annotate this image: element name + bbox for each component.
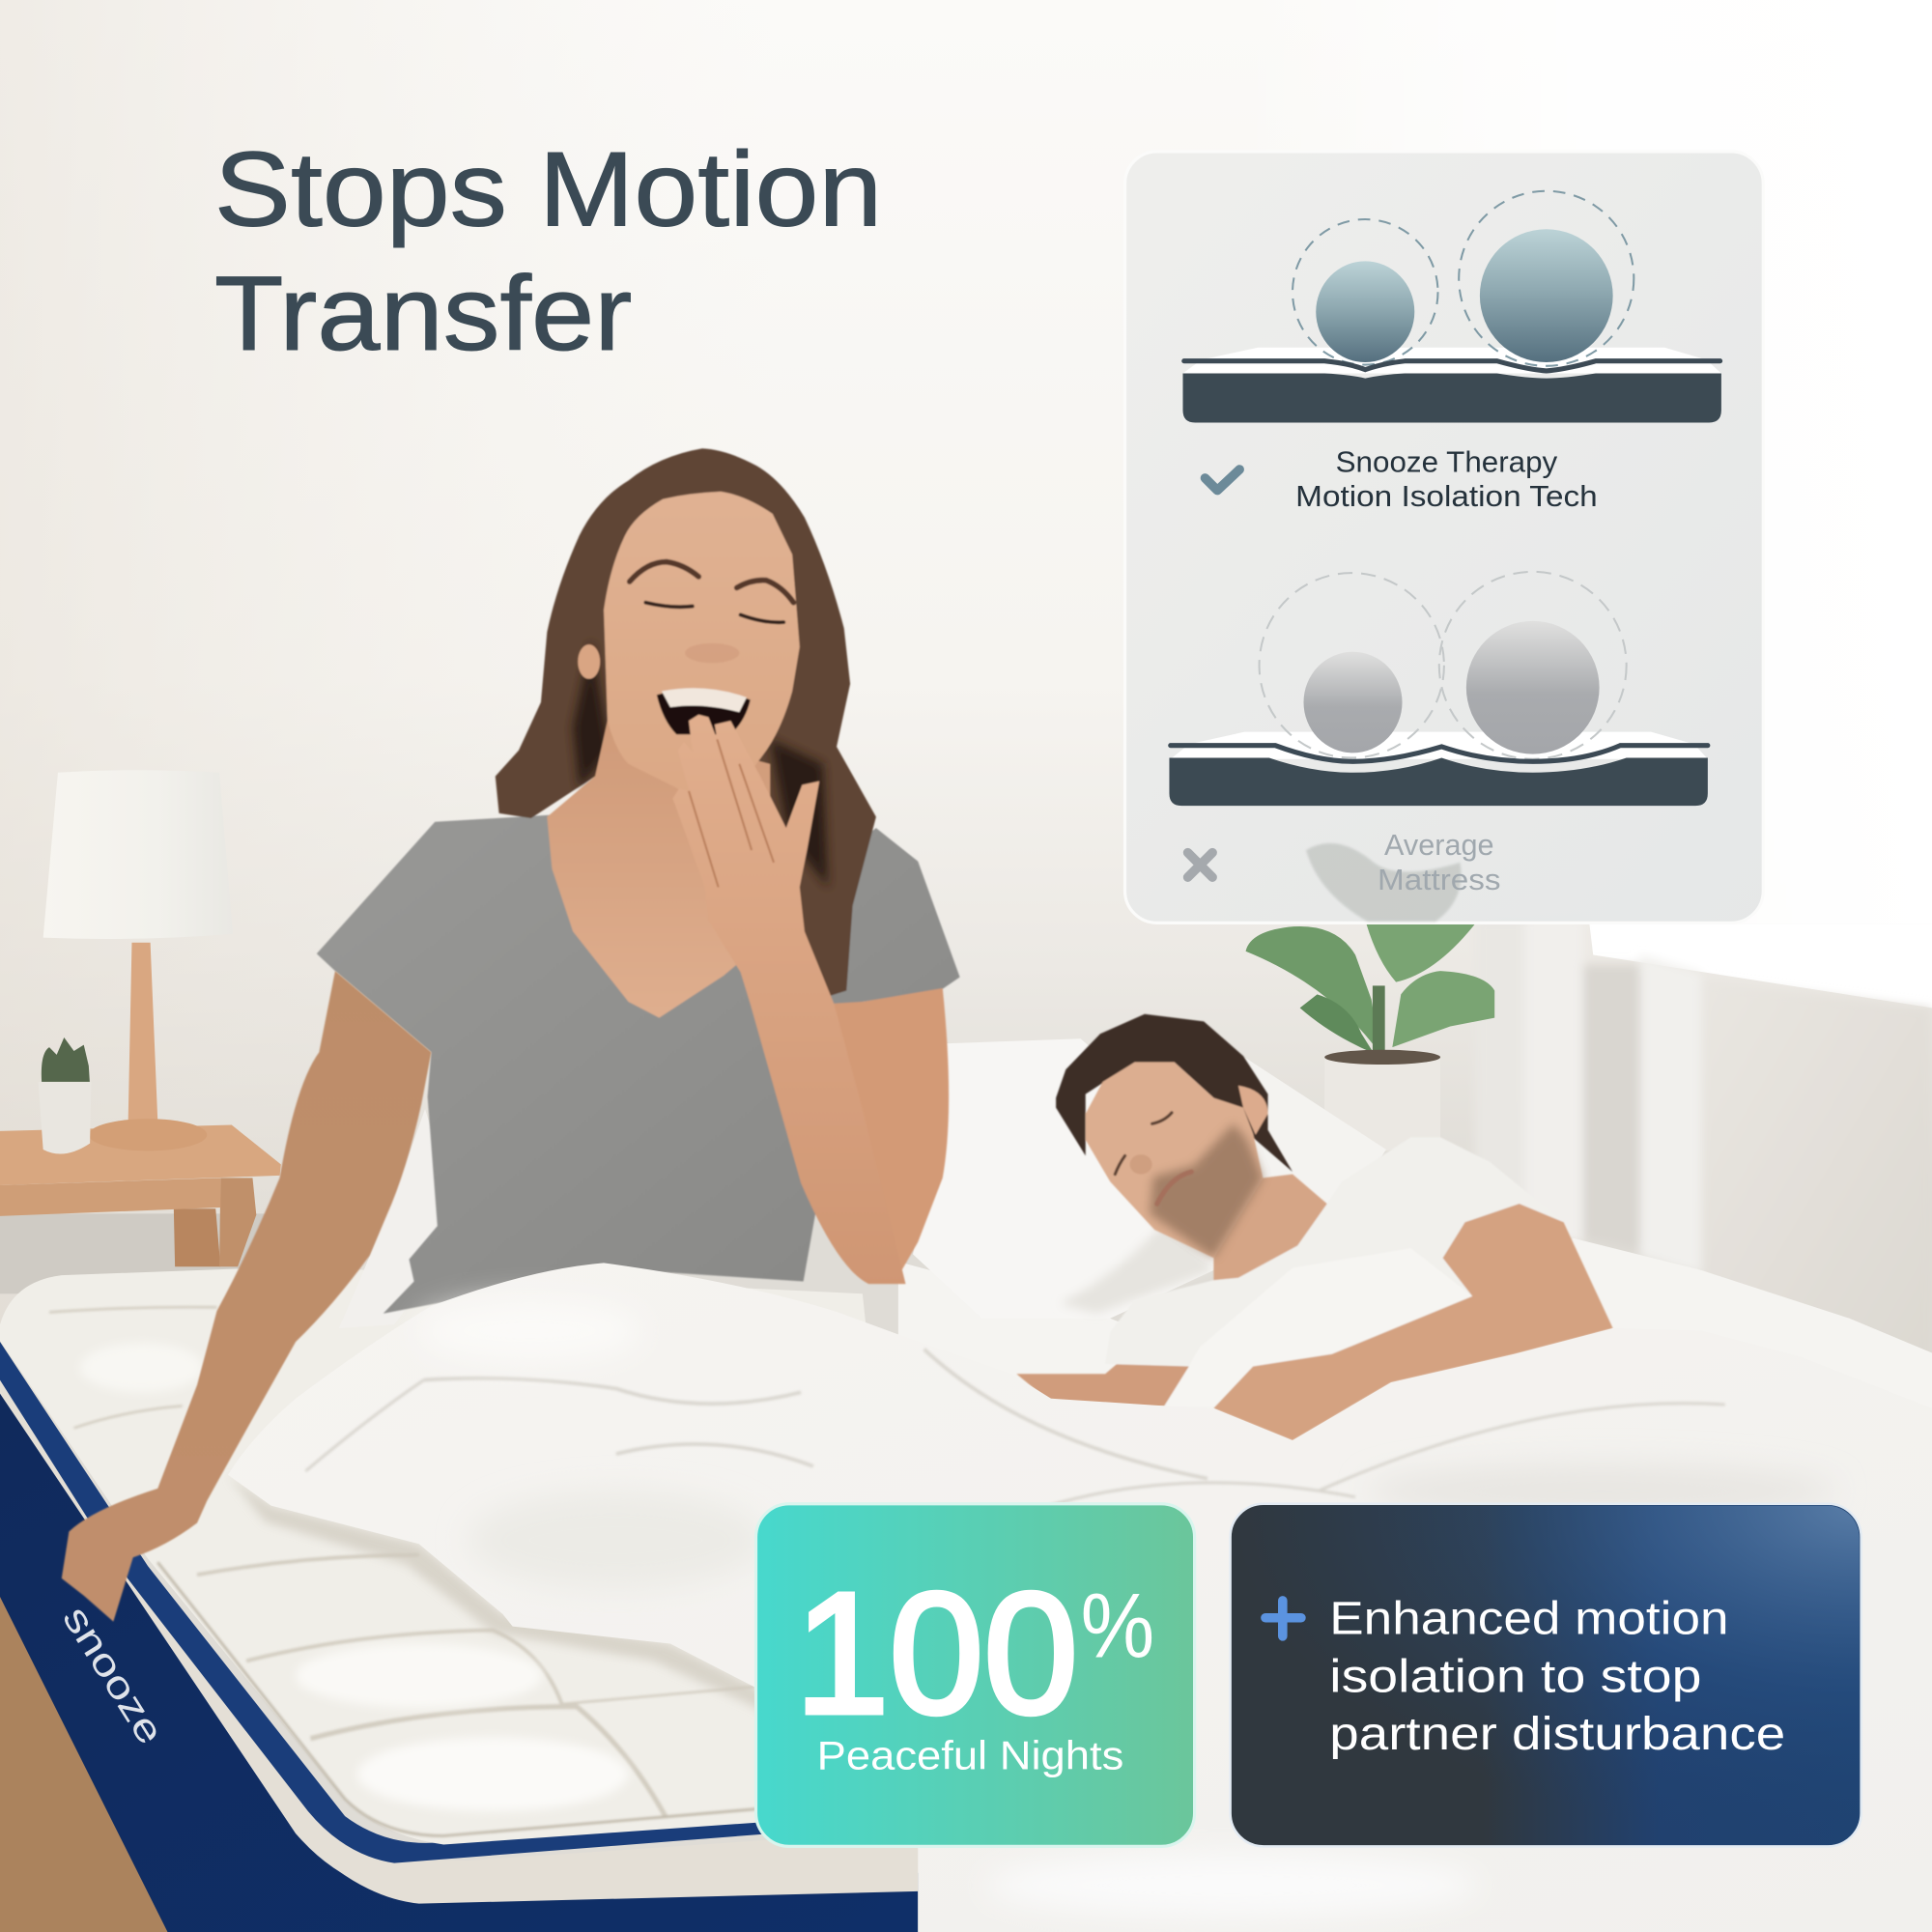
panel: motion comparison xyxy=(1125,152,1763,923)
mattress top line xyxy=(1184,361,1720,371)
x icon xyxy=(1188,853,1212,877)
woman's eyes and brows xyxy=(630,562,793,622)
duvet soft shading xyxy=(419,1300,1836,1918)
card: enhanced motion isolation xyxy=(1231,1504,1861,1846)
diagram: Snooze Therapy mattress xyxy=(1182,191,1721,423)
pillow behind woman xyxy=(339,1109,462,1328)
hair shadows xyxy=(573,640,828,887)
woman's hair xyxy=(496,448,876,998)
title: Transfer xyxy=(214,255,632,373)
man's neck xyxy=(1213,1175,1327,1280)
inner duvet piece xyxy=(1164,1248,1472,1406)
label: Snooze Therapy: Snooze Therapy xyxy=(1336,446,1558,479)
man's face xyxy=(1086,1062,1263,1258)
motion rings xyxy=(1260,572,1627,759)
man's shirt xyxy=(1105,1137,1564,1367)
man's far arm xyxy=(1016,1353,1189,1409)
benefit text: partner disturbance xyxy=(1329,1708,1785,1760)
benefit text: isolation to stop xyxy=(1329,1650,1701,1702)
label: Average Mattress: Average xyxy=(1384,829,1494,862)
title xyxy=(214,130,882,373)
mattress body xyxy=(1182,373,1721,423)
benefit text xyxy=(1329,1592,1785,1760)
mattress top surface xyxy=(0,1266,918,1844)
mattress side panel xyxy=(0,1392,918,1932)
balls xyxy=(1303,621,1600,754)
mattress body xyxy=(1169,757,1708,806)
100 figure: 100 xyxy=(795,1556,1078,1749)
shadow below nightstand xyxy=(0,1213,265,1293)
small potted plant xyxy=(39,1037,91,1154)
woman's ear xyxy=(578,644,600,679)
man xyxy=(1016,1014,1613,1440)
card background xyxy=(1231,1504,1861,1846)
window curtains xyxy=(1475,918,1932,1368)
wood floor xyxy=(0,1589,173,1932)
plus icon xyxy=(1265,1601,1301,1636)
man's nose xyxy=(1130,1154,1152,1175)
leaf shadow through panel xyxy=(1306,843,1462,922)
caption: Peaceful Nights xyxy=(817,1733,1123,1778)
woman xyxy=(317,448,960,1314)
check icon xyxy=(1205,469,1239,491)
panel background xyxy=(1125,152,1763,923)
brand logo on mattress: snooze xyxy=(54,1599,172,1751)
label: Average Mattress: Mattress xyxy=(1378,864,1501,896)
man's pillow xyxy=(913,1038,1386,1319)
balls xyxy=(1316,229,1613,362)
woman's t-shirt xyxy=(317,813,960,1314)
woman's face xyxy=(604,492,800,801)
quilted panel highlights xyxy=(80,1343,629,1811)
label: Average Mattress xyxy=(1378,829,1501,896)
man's ear xyxy=(1238,1086,1267,1135)
man's near arm and hand xyxy=(1213,1204,1613,1440)
label: Snooze Therapy xyxy=(1295,446,1598,513)
man's beard xyxy=(1150,1123,1263,1258)
finger lines xyxy=(689,739,774,887)
duvet main xyxy=(228,1263,1932,1932)
card background xyxy=(756,1504,1195,1846)
mattress piping xyxy=(0,1342,773,1863)
woman's hand and forearm xyxy=(672,715,906,1284)
duvet xyxy=(228,1263,1932,1932)
label: Snooze Therapy: Motion Isolation Tech xyxy=(1295,480,1598,513)
woman's upper right arm xyxy=(823,988,949,1283)
large potted plant xyxy=(1246,924,1494,1152)
diagram: average mattress xyxy=(1169,572,1708,806)
quilting seams xyxy=(49,1307,759,1836)
table lamp xyxy=(43,770,233,1151)
man's hair xyxy=(1056,1014,1293,1172)
mattress layer white xyxy=(1182,348,1721,373)
mattress white band xyxy=(0,1337,918,1904)
nightstand xyxy=(0,1125,281,1266)
mattress layer white xyxy=(1171,732,1708,759)
woman's left arm xyxy=(62,971,431,1622)
woman's nose xyxy=(685,643,739,663)
duvet folds xyxy=(305,1350,1725,1540)
woman's open mouth xyxy=(657,689,751,734)
card: 100% peaceful nights xyxy=(756,1504,1195,1846)
mattress xyxy=(0,1266,918,1932)
motion rings xyxy=(1293,191,1634,366)
back bedding xyxy=(898,1238,1932,1602)
man's features xyxy=(1115,1113,1191,1204)
woman's neck and chest xyxy=(547,721,770,1018)
duvet shadow on mattress xyxy=(228,1475,918,1824)
benefit text: Enhanced motion xyxy=(1329,1592,1729,1644)
mattress top line xyxy=(1171,746,1708,761)
percent sign: % xyxy=(1081,1577,1154,1678)
title: Stops Motion xyxy=(214,130,882,248)
